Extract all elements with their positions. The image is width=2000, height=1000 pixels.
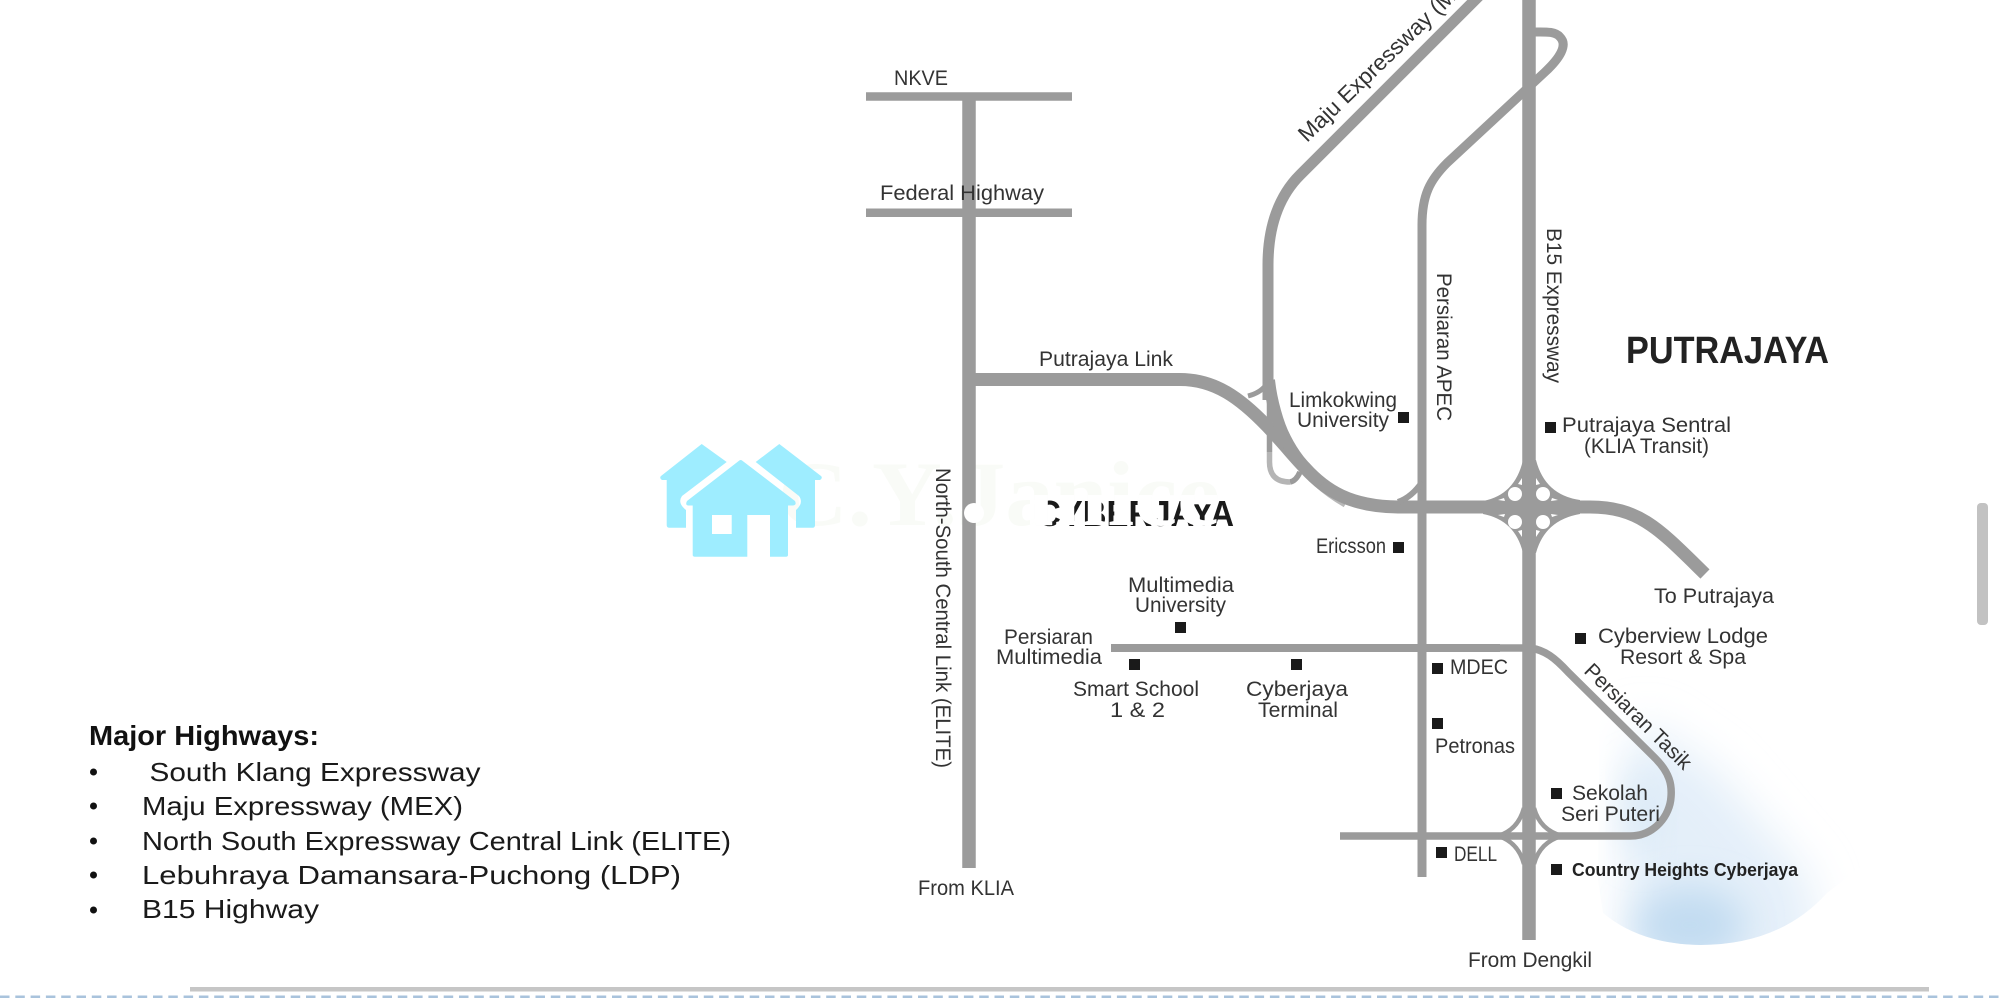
- label: To Putrajaya: To Putrajaya: [1654, 585, 1774, 608]
- label: Smart School: 1 & 2: [1110, 699, 1165, 722]
- label: Putrajaya Sentral: [1545, 414, 1731, 458]
- upper interchange: [1483, 460, 1580, 553]
- label: Petronas: Petronas: [1435, 735, 1515, 758]
- label: Persiaran Multimedia: Persiaran: [1004, 626, 1093, 649]
- label: Ericsson: Ericsson: [1316, 535, 1386, 558]
- label: Multimedia University: [1128, 574, 1234, 633]
- list item: Maju: Maju Expressway (MEX): [142, 791, 463, 821]
- list item: Lebuhraya: Lebuhraya Damansara-Puchong (LDP): [142, 860, 681, 890]
- label: Cyberview Lodge: [1575, 625, 1768, 669]
- label: DELL: DELL: [1454, 843, 1497, 866]
- label: MDEC: MDEC: [1450, 656, 1508, 679]
- road: Persiaran APEC: [1422, 32, 1563, 877]
- label: Persiaran Multimedia: Multimedia: [996, 646, 1102, 669]
- label: From KLIA: From KLIA: [918, 877, 1014, 900]
- label: Sekolah Seri Puteri: [1551, 782, 1660, 826]
- road: NKVE: [866, 92, 1072, 101]
- label: Limkokwing University: Limkokwing: [1289, 389, 1397, 412]
- list item: North South: North South Expressway Central Link (ELITE): [142, 826, 731, 856]
- label: Persiaran Tasik: Persiaran Tasik: [1579, 659, 1697, 775]
- road: APEC ramp: [1398, 482, 1422, 502]
- label: DELL: [1436, 843, 1497, 866]
- road: B15 Expressway: [1522, 0, 1536, 940]
- footer dashed line: [0, 996, 2000, 998]
- label: Persiaran Multimedia: [996, 626, 1102, 669]
- label: Federal Highway: Federal Highway: [880, 182, 1045, 205]
- label: Multimedia University: University: [1135, 594, 1226, 617]
- label: Cyberview Lodge: Resort & Spa: [1620, 646, 1746, 669]
- lake glow: [1625, 720, 1820, 980]
- list item: B15: B15 Highway: [142, 894, 319, 924]
- label: Country Heights Cyberjaya: Country Heights Cyberjaya: [1572, 860, 1799, 880]
- label: Cyberjaya Terminal: Terminal: [1258, 699, 1338, 722]
- label: Sekolah Seri Puteri: Seri Puteri: [1561, 803, 1660, 826]
- road: upper ramp: [1248, 385, 1266, 396]
- label: Cyberjaya Terminal: Cyberjaya: [1246, 678, 1348, 701]
- list item: B15: [90, 894, 319, 924]
- watermark: C.Y.Janice: [778, 443, 1220, 545]
- road: Putrajaya Link to Putrajaya: [975, 380, 1705, 574]
- label: Persiaran APEC: Persiaran APEC: [1432, 273, 1455, 421]
- label: Petronas: [1432, 718, 1515, 758]
- label: Smart School: Smart School: [1073, 678, 1199, 701]
- road: Maju Expressway: [1268, 0, 1480, 400]
- label: Putrajaya Sentral: (KLIA Transit): [1584, 435, 1709, 458]
- label: Smart School: [1073, 659, 1199, 722]
- label: CYBERJAYA: CYBERJAYA: [1037, 493, 1234, 534]
- heading: Major Highways: Major Highways:: [89, 720, 319, 751]
- label: Cyberjaya Terminal: [1246, 659, 1348, 722]
- road: North-South Central Link: [962, 96, 976, 868]
- label: North-South Central Link: North-South Central Link (ELITE): [931, 468, 954, 768]
- label: Putrajaya Sentral: Putrajaya Sentral: [1562, 414, 1731, 437]
- footer bar: [190, 987, 1929, 992]
- label: B15 Expressway: B15 Expressway: [1542, 228, 1565, 383]
- road map: [866, 0, 1705, 940]
- watermark overlay on CYBERJAYA: C.Y.Janice: [778, 443, 1220, 545]
- highways list: [89, 720, 731, 924]
- label: PUTRAJAYA: PUTRAJAYA: [1626, 330, 1829, 372]
- road: light edge strip: [1316, 484, 1345, 505]
- road: Federal Highway: [866, 208, 1072, 217]
- label: Putrajaya Link: Putrajaya Link: [1039, 348, 1174, 371]
- label: Limkokwing University: University: [1297, 409, 1389, 432]
- road: Maju loop dark: [1270, 395, 1300, 482]
- icon: houses logo: [660, 444, 822, 557]
- road: Persiaran Multimedia: [1111, 644, 1500, 652]
- label: From Dengkil: From Dengkil: [1468, 949, 1592, 972]
- label: Cyberview Lodge: Cyberview Lodge: [1598, 625, 1768, 648]
- watermark hook over road: [964, 503, 984, 523]
- label: NKVE: NKVE: [894, 67, 948, 90]
- label: Multimedia University: Multimedia: [1128, 574, 1234, 597]
- label: Sekolah Seri Puteri: Sekolah: [1572, 782, 1648, 805]
- road: Maju merge: [1269, 380, 1322, 484]
- list item: South Klang: South Klang Expressway: [150, 757, 480, 787]
- scrollbar: [1977, 503, 1988, 625]
- road: Maju loop light: [1270, 452, 1290, 482]
- road: lower interchange ramps: [1498, 808, 1562, 864]
- road: Persiaran Tasik: [1340, 648, 1671, 836]
- label: Limkokwing University: [1289, 389, 1409, 432]
